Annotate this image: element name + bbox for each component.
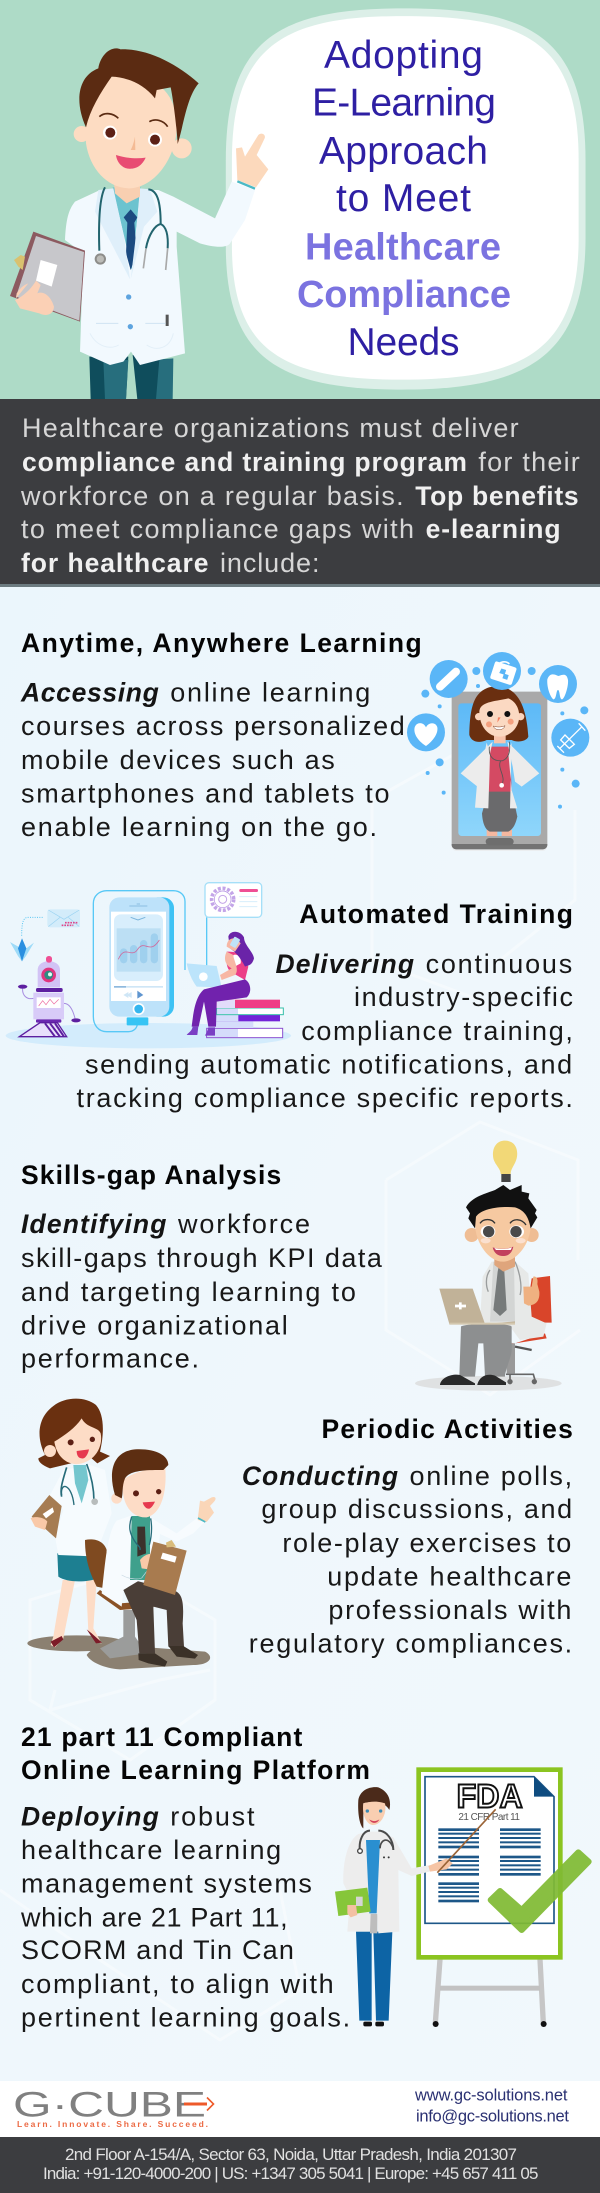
presenter — [335, 1787, 496, 2026]
board — [419, 1770, 560, 1957]
title: Compliance — [297, 274, 511, 316]
title: Adopting — [324, 34, 483, 77]
body text: enable learning on the go. — [21, 812, 377, 842]
trousers — [89, 355, 173, 399]
body text: professionals with — [328, 1595, 571, 1625]
document: 21 CFR Part 11 — [458, 1812, 520, 1823]
body text: SCORM and Tin Can — [21, 1935, 294, 1965]
body text: group discussions, and — [261, 1494, 572, 1524]
title: to Meet — [336, 177, 471, 220]
body text: smartphones and tablets to — [21, 778, 390, 808]
panel: header background — [0, 0, 600, 399]
body text: drive organizational — [21, 1310, 288, 1340]
gear card — [205, 883, 262, 967]
tie — [493, 1263, 507, 1316]
body text: management systems — [21, 1869, 312, 1899]
body text: workforce — [177, 1209, 310, 1239]
intro text — [20, 413, 580, 578]
heading: 21 part 11 Compliant — [21, 1722, 302, 1752]
title: Needs — [348, 321, 460, 364]
intro text: to meet compliance gaps with — [21, 514, 414, 544]
logo: Learn. Innovate. Share. Succeed. — [17, 2119, 208, 2129]
floor shadows — [27, 1635, 126, 1651]
floor — [6, 1023, 291, 1048]
heading — [21, 1722, 370, 1785]
phone outline with cable — [93, 891, 185, 1032]
stack of books — [207, 1000, 283, 1038]
section: Automated Training — [76, 899, 573, 1113]
body text: skill-gaps through KPI data — [21, 1243, 383, 1273]
panel: footer contact strip — [0, 2081, 600, 2137]
body text: continuous — [426, 949, 572, 979]
section: Skills-gap Analysis — [21, 1160, 383, 1374]
body text: online polls, — [410, 1461, 572, 1491]
intro text: include: — [220, 548, 320, 578]
title: E-Learning — [312, 82, 496, 125]
head — [74, 48, 199, 203]
body text: Accessing — [20, 678, 159, 708]
phone — [109, 897, 174, 1025]
illustration: automated training phone, robot and learner — [6, 883, 291, 1048]
body text — [20, 678, 405, 842]
heading: Skills-gap Analysis — [21, 1160, 281, 1190]
heading: Anytime, Anywhere Learning — [21, 628, 422, 658]
section: 21 part 11 Compliant Online Learning Platform — [20, 1722, 370, 2033]
stethoscope — [96, 187, 168, 270]
intro text: workforce on a regular basis. — [20, 481, 404, 511]
contact links — [414, 2087, 569, 2126]
speech bubble — [226, 8, 586, 390]
hand pointing — [236, 134, 268, 187]
shirt and tie — [95, 187, 157, 279]
logo: G·CUBE — [13, 2086, 206, 2125]
heading: Online Learning Platform — [21, 1755, 370, 1785]
body text: compliant, to align with — [21, 1969, 334, 1999]
address text: India: +91-120-4000-200 | US: +1347 305 5041 | Europe: +45 657 411 05 — [43, 2164, 538, 2183]
body text: online learning — [170, 678, 370, 708]
illustration: two doctors with clipboard — [27, 1399, 216, 1669]
address text — [43, 2145, 538, 2183]
body text: performance. — [21, 1344, 199, 1374]
section: Anytime, Anywhere Learning — [20, 628, 422, 842]
body text: healthcare learning — [21, 1835, 281, 1865]
chair — [85, 1539, 157, 1658]
contact links: info@gc-solutions.net — [416, 2108, 569, 2126]
body text: courses across personalized — [21, 711, 405, 741]
document — [425, 1777, 554, 1923]
legs — [440, 1324, 512, 1385]
section: Periodic Activities — [242, 1414, 573, 1659]
body text — [20, 1802, 350, 2033]
thumb-up hand — [523, 1277, 539, 1306]
male doctor — [102, 1449, 216, 1667]
body text: mobile devices such as — [21, 745, 335, 775]
title — [297, 34, 511, 364]
heading: Periodic Activities — [322, 1414, 573, 1444]
body text: Conducting — [242, 1461, 398, 1491]
intro text: for healthcare — [21, 548, 208, 578]
body text: and targeting learning to — [21, 1277, 356, 1307]
title: Healthcare — [305, 226, 501, 268]
illustration: doctor on smartphone with medical icons — [407, 652, 589, 851]
panel: benefits background — [0, 587, 600, 2081]
phone — [452, 692, 547, 851]
body text: update healthcare — [327, 1562, 571, 1592]
envelope — [22, 909, 80, 937]
easel legs — [433, 1959, 547, 2027]
intro text: e-learning — [426, 514, 561, 544]
address text: 2nd Floor A-154/A, Sector 63, Noida, Uttar Pradesh, India 201307 — [65, 2145, 517, 2164]
location marker — [10, 938, 34, 961]
clipboard — [10, 232, 85, 322]
body text: compliance training, — [301, 1016, 573, 1046]
body text: tracking compliance specific reports. — [76, 1083, 573, 1113]
medical icons — [407, 652, 589, 809]
coat details — [90, 294, 173, 348]
intro text: Top benefits — [415, 481, 579, 511]
panel: intro band — [0, 399, 600, 587]
body text: Identifying — [21, 1209, 166, 1239]
intro text: compliance and training program — [22, 447, 467, 477]
robot — [18, 956, 81, 1037]
body text — [76, 949, 573, 1113]
document: FDA — [457, 1779, 523, 1816]
body text: sending automatic notifications, and — [85, 1050, 572, 1080]
logo — [13, 2086, 214, 2129]
panel: footer address band — [0, 2137, 600, 2193]
body text: role-play exercises to — [282, 1528, 571, 1558]
illustration: FDA compliance board with presenter — [335, 1770, 589, 2027]
body text: which are 21 Part 11, — [20, 1903, 288, 1933]
intro text: for their — [478, 447, 580, 477]
heading: Automated Training — [299, 899, 573, 929]
body text: pertinent learning goals. — [21, 2003, 350, 2033]
body text: robust — [170, 1802, 255, 1832]
body text: Delivering — [276, 949, 414, 979]
body text: industry-specific — [354, 982, 573, 1012]
laptop — [439, 1289, 515, 1325]
stethoscope — [486, 1262, 521, 1295]
lab coat — [65, 182, 255, 365]
body text — [21, 1209, 383, 1374]
check mark — [491, 1852, 589, 1930]
female doctor — [31, 1399, 112, 1647]
doctor — [461, 686, 539, 836]
illustration: doctor pointing — [10, 48, 268, 399]
head — [465, 1185, 539, 1272]
chair — [478, 1276, 552, 1384]
body text: regulatory compliances. — [249, 1629, 572, 1659]
contact links: www.gc-solutions.net — [414, 2087, 568, 2105]
body text — [242, 1461, 572, 1659]
light bulb — [493, 1141, 517, 1182]
illustration: man with laptop and idea bulb — [415, 1141, 562, 1391]
title: Approach — [319, 130, 488, 173]
body text: Deploying — [21, 1802, 159, 1832]
woman with laptop — [187, 932, 254, 1036]
coat — [480, 1262, 547, 1340]
intro text: Healthcare organizations must deliver — [22, 413, 519, 443]
